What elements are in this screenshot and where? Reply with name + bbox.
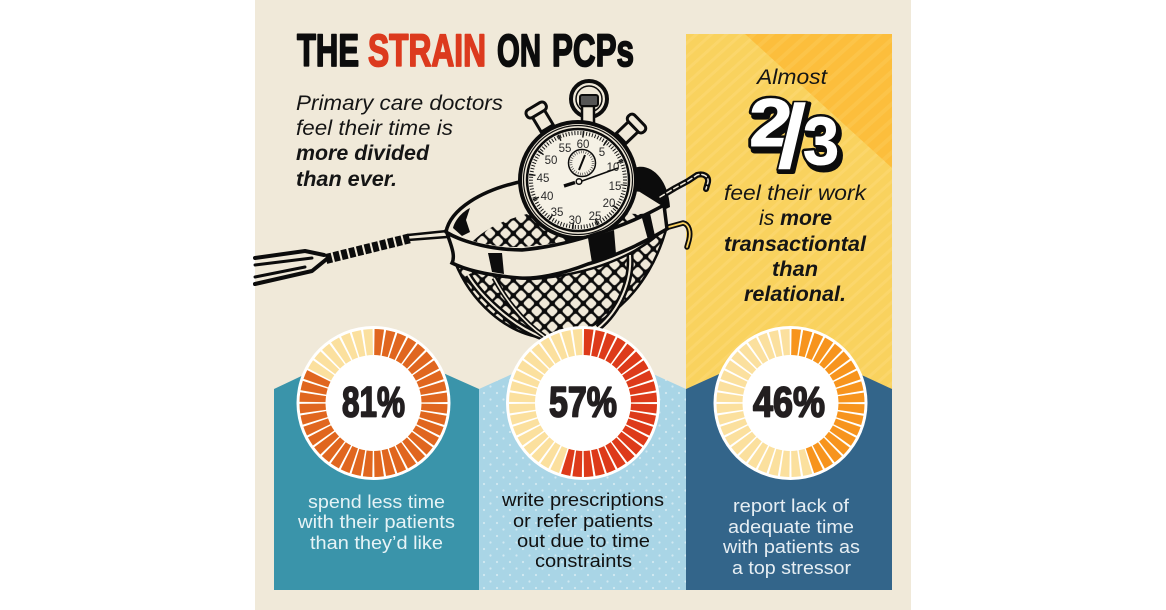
icon: second hand xyxy=(564,168,618,186)
panel: yellow column xyxy=(686,34,892,394)
number: 2/3: 2 xyxy=(752,89,796,165)
dial numbers: 35 xyxy=(551,207,563,219)
intro text: more divided xyxy=(296,142,430,165)
title: STRAIN xyxy=(368,25,486,76)
icon: right button xyxy=(613,113,647,146)
number: 2/3: 3 xyxy=(803,103,839,179)
value: 57% xyxy=(549,378,617,426)
dial numbers xyxy=(537,139,621,227)
intro text xyxy=(296,92,504,191)
donut chart: 57% xyxy=(506,326,660,480)
text: light blue caption: write prescriptions xyxy=(501,489,664,510)
text: feel their work: feel their work xyxy=(724,182,868,205)
number: 2/3: 2 xyxy=(749,85,793,161)
dial numbers: 30 xyxy=(569,215,581,227)
dial numbers: 60 xyxy=(577,139,589,151)
text: feel their work: relational. xyxy=(744,283,846,306)
dial numbers: 10 xyxy=(607,162,619,174)
text: navy caption: a top stressor xyxy=(732,557,851,578)
dial numbers: 15 xyxy=(609,181,621,193)
dial numbers: 45 xyxy=(537,173,549,185)
text: feel their work: than xyxy=(772,258,818,281)
text: light blue caption: out due to time xyxy=(517,530,650,551)
text: light blue caption: constraints xyxy=(535,550,632,571)
text: teal caption: with their patients xyxy=(297,511,455,532)
dial numbers: 40 xyxy=(541,191,553,203)
icon: stopwatch xyxy=(520,81,647,238)
panel: navy xyxy=(686,342,892,590)
text: navy caption: adequate time xyxy=(728,516,854,537)
dial numbers: 25 xyxy=(589,211,601,223)
donut chart: 81% xyxy=(296,326,450,480)
label: almost: Almost xyxy=(755,66,828,89)
dial numbers: 50 xyxy=(545,155,557,167)
icon: strainer handle xyxy=(255,231,447,284)
dial numbers: 5 xyxy=(599,147,605,159)
text: light blue caption xyxy=(501,489,664,571)
text: navy caption xyxy=(722,495,860,578)
text: feel their work: is more xyxy=(759,207,832,230)
callout: two thirds xyxy=(724,66,868,306)
illustration: strainer and stopwatch xyxy=(255,81,708,338)
intro text: than ever. xyxy=(296,168,397,191)
number: 2/3: 2 xyxy=(749,85,793,161)
icon: left button xyxy=(524,100,557,134)
dial numbers: 55 xyxy=(559,143,571,155)
icon: crown ring xyxy=(571,81,607,124)
panel: light blue dotted xyxy=(479,342,686,590)
number: 2/3 xyxy=(749,85,842,190)
number: 2/3: / xyxy=(778,88,810,190)
text: navy caption: report lack of xyxy=(733,495,850,516)
title: PCPs xyxy=(552,25,634,76)
text: feel their work xyxy=(724,182,868,306)
title: THE xyxy=(297,25,359,76)
text: light blue caption: or refer patients xyxy=(513,510,653,531)
intro text: Primary care doctors xyxy=(296,92,504,115)
intro text: feel their time is xyxy=(296,117,454,140)
text: teal caption xyxy=(297,491,455,553)
icon: strainer front band xyxy=(447,205,667,278)
icon: strainer basket mesh xyxy=(455,226,667,338)
icon: strainer hooks xyxy=(660,174,708,247)
text: navy caption: with patients as xyxy=(722,536,860,557)
title xyxy=(297,25,634,76)
icon: watch case xyxy=(520,122,636,238)
dial numbers: 20 xyxy=(603,198,615,210)
number: 2/3: 3 xyxy=(806,107,842,183)
text: teal caption: than they’d like xyxy=(310,532,443,553)
number: 2/3: 3 xyxy=(803,103,839,179)
value: 46% xyxy=(753,378,825,426)
icon: watch dial xyxy=(524,126,632,234)
icon: strainer back rim and interior mesh xyxy=(446,167,670,250)
text: feel their work: transactiontal xyxy=(724,233,867,256)
value: 81% xyxy=(342,378,405,426)
number: 2/3: / xyxy=(776,86,808,188)
icon: sub dial xyxy=(568,150,596,176)
background xyxy=(255,0,911,610)
text: teal caption: spend less time xyxy=(308,491,445,512)
panel: teal xyxy=(274,342,479,590)
title: ON xyxy=(497,25,541,76)
donut chart: 46% xyxy=(714,326,868,480)
